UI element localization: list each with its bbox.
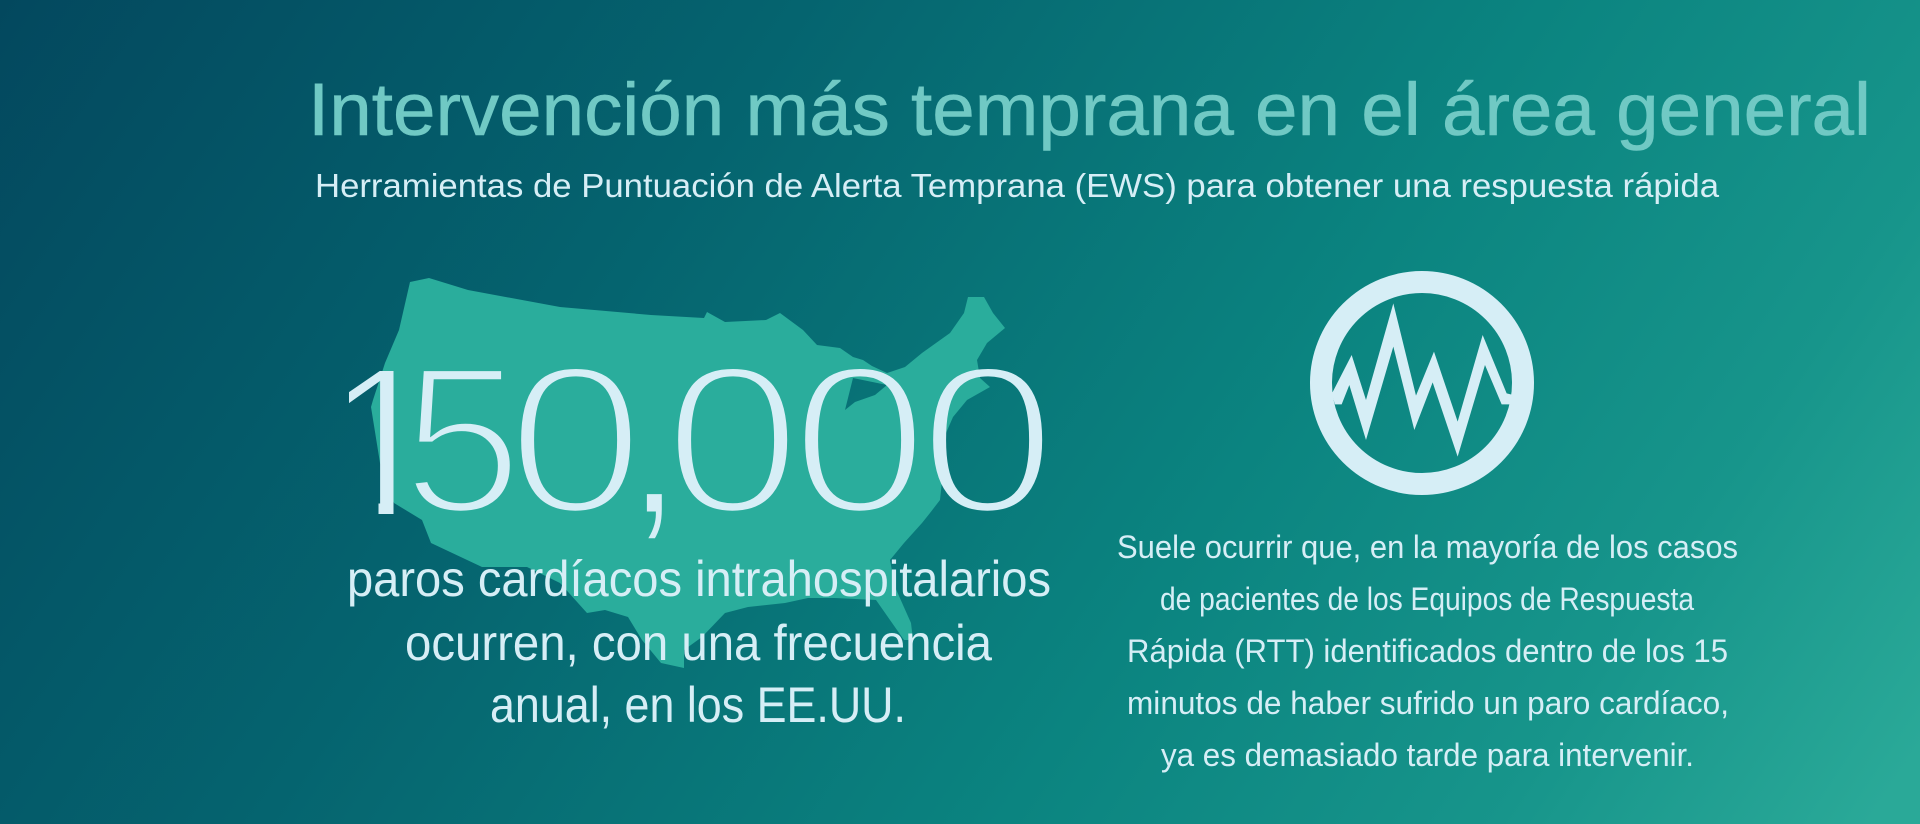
icon: vital signs waveform in a circle bbox=[1321, 282, 1523, 484]
explanatory paragraph bbox=[1117, 529, 1738, 773]
big number bbox=[349, 369, 1042, 538]
explanatory paragraph: Suele ocurrir que, en la mayoría de los casos bbox=[1117, 529, 1738, 565]
panel: cardiac arrest statistic bbox=[323, 278, 1056, 733]
big number: , bbox=[625, 326, 683, 559]
big number: 0 bbox=[919, 321, 1056, 558]
title: Intervención más temprana en el área general bbox=[308, 68, 1871, 151]
map of the United States bbox=[371, 278, 1005, 668]
big number: 0 bbox=[664, 321, 801, 558]
big number: 1 bbox=[323, 321, 443, 563]
explanatory paragraph: Rápida (RTT) identificados dentro de los 15 bbox=[1127, 633, 1728, 669]
statistic caption: paros cardíacos intrahospitalarios bbox=[347, 551, 1051, 607]
panel: rapid response note bbox=[1117, 282, 1738, 773]
statistic caption bbox=[347, 551, 1051, 733]
explanatory paragraph: ya es demasiado tarde para intervenir. bbox=[1161, 737, 1694, 773]
subtitle: Herramientas de Puntuación de Alerta Temprana (EWS) para obtener una respuesta rápida bbox=[315, 167, 1720, 204]
statistic caption: ocurren, con una frecuencia bbox=[405, 615, 992, 671]
explanatory paragraph: de pacientes de los Equipos de Respuesta bbox=[1160, 581, 1694, 617]
explanatory paragraph: minutos de haber sufrido un paro cardíaco, bbox=[1127, 685, 1729, 721]
statistic caption: anual, en los EE.UU. bbox=[490, 677, 906, 733]
big number: 0 bbox=[507, 321, 644, 558]
big number: 5 bbox=[402, 322, 523, 558]
big number: 0 bbox=[791, 321, 928, 558]
